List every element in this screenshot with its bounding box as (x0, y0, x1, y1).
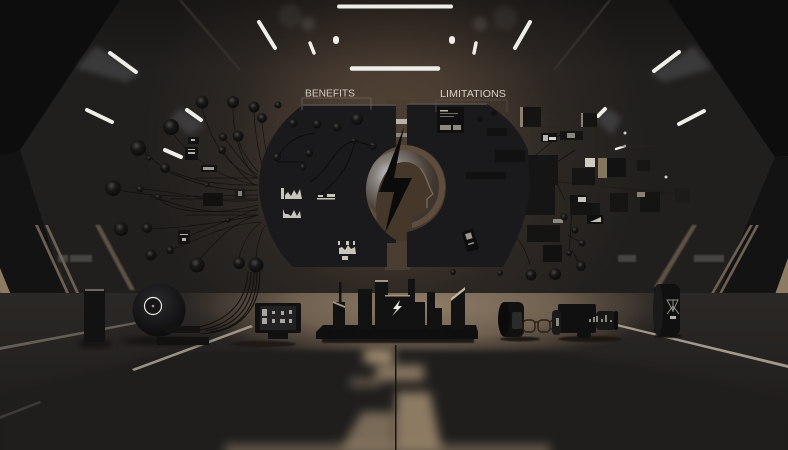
left node cluster (105, 96, 282, 272)
panel: benefits (259, 98, 396, 267)
heading: limitations: LIMITATIONS (440, 88, 506, 100)
ceiling and side structure (0, 0, 788, 300)
limitations panel bracket (436, 100, 507, 112)
right node cluster (450, 214, 586, 280)
floor (0, 293, 788, 450)
smartwatch (498, 302, 540, 342)
right device cluster (520, 107, 690, 262)
ceiling lights (87, 6, 704, 157)
panel: limitations (407, 100, 530, 267)
right wires (512, 113, 690, 266)
cables to floor (195, 272, 260, 334)
benefits panel knobs (273, 113, 377, 170)
wrist band device (653, 284, 682, 338)
wall ghost reflections (58, 255, 724, 262)
central city model with lightning (316, 279, 478, 343)
benefits panel wires (277, 133, 373, 195)
VR headset (552, 304, 622, 342)
portal with head silhouette and glow (361, 100, 445, 270)
limitations panel tag (461, 229, 479, 252)
benefits panel charts (281, 188, 356, 260)
back wall (0, 0, 788, 300)
light streak on floor (225, 349, 550, 450)
lightning bolt icon (379, 127, 412, 233)
speaker device (77, 289, 113, 348)
limitations panel raised blocks (466, 110, 525, 179)
sphere robot (120, 284, 210, 345)
city model bolt icon (392, 300, 402, 316)
tablet device (230, 303, 301, 347)
city model shadow (322, 338, 474, 343)
glasses (523, 318, 558, 334)
sphere ring light (144, 298, 162, 314)
left wires (118, 108, 267, 262)
left small devices (178, 137, 245, 244)
limitations panel screen card (437, 107, 464, 133)
heading: benefits: BENEFITS (305, 88, 355, 100)
benefits panel bracket (302, 98, 371, 110)
